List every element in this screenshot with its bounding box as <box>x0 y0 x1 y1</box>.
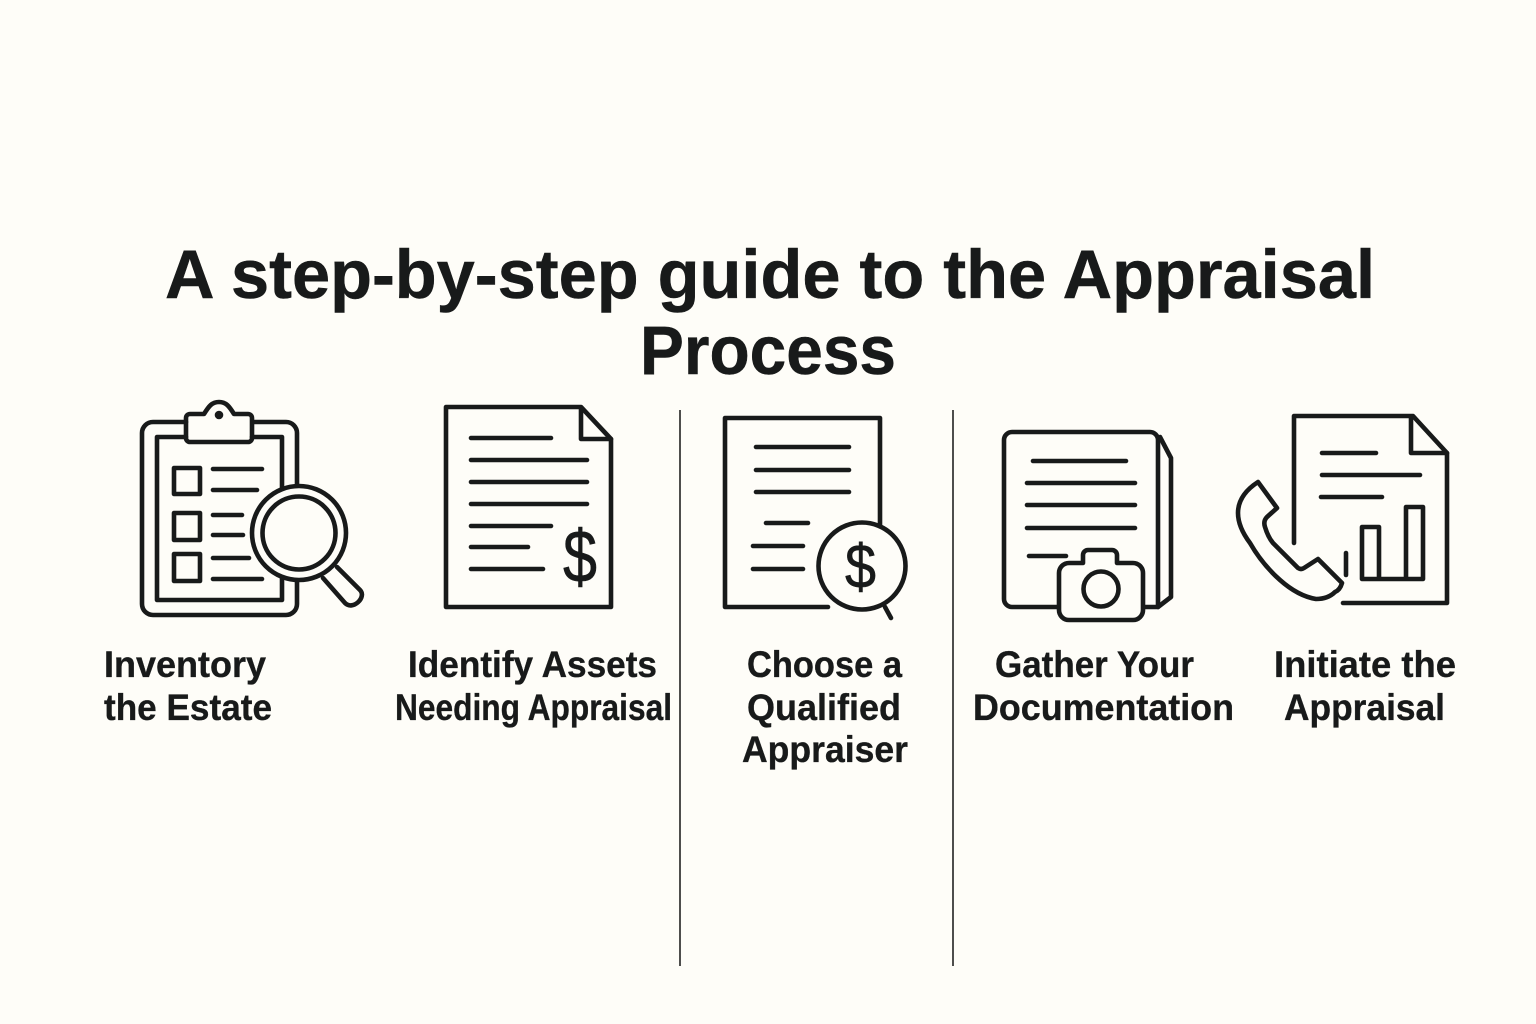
label: inventory the estate <box>104 643 272 728</box>
icon: phone with document and bar chart <box>1238 416 1447 603</box>
label: gather your documentation: Gather Your <box>995 643 1194 685</box>
label: choose a qualified appraiser: Qualified <box>747 686 901 728</box>
label: choose a qualified appraiser: Appraiser <box>742 728 908 770</box>
label: initiate the appraisal <box>1274 643 1456 728</box>
divider: left <box>679 410 681 966</box>
icon: document with dollar sign <box>446 407 611 607</box>
label: identify assets needing appraisal: Identify Assets <box>408 643 657 685</box>
title: Process <box>640 312 896 389</box>
label: initiate the appraisal: Initiate the <box>1274 643 1456 685</box>
label: choose a qualified appraiser: Choose a <box>747 643 903 685</box>
title: A step-by-step guide to the Appraisal <box>165 236 1375 313</box>
label: identify assets needing appraisal: Needing Appraisal <box>395 686 672 728</box>
label: initiate the appraisal: Appraisal <box>1284 686 1445 728</box>
label: gather your documentation: Documentation <box>973 686 1234 728</box>
icon: document with dollar magnifier <box>725 418 906 618</box>
icon: clipboard with magnifying glass <box>142 402 362 615</box>
label: choose a qualified appraiser <box>742 643 908 770</box>
label: inventory the estate: the Estate <box>104 686 272 728</box>
label: gather your documentation <box>973 643 1234 728</box>
label: identify assets needing appraisal <box>395 643 672 728</box>
divider: right <box>952 410 954 966</box>
label: inventory the estate: Inventory <box>104 643 266 685</box>
title <box>165 236 1375 389</box>
icon: document with camera <box>1004 432 1171 620</box>
icon: document with dollar magnifier: $ <box>845 533 876 602</box>
icon: document with dollar sign: $ <box>563 515 597 598</box>
